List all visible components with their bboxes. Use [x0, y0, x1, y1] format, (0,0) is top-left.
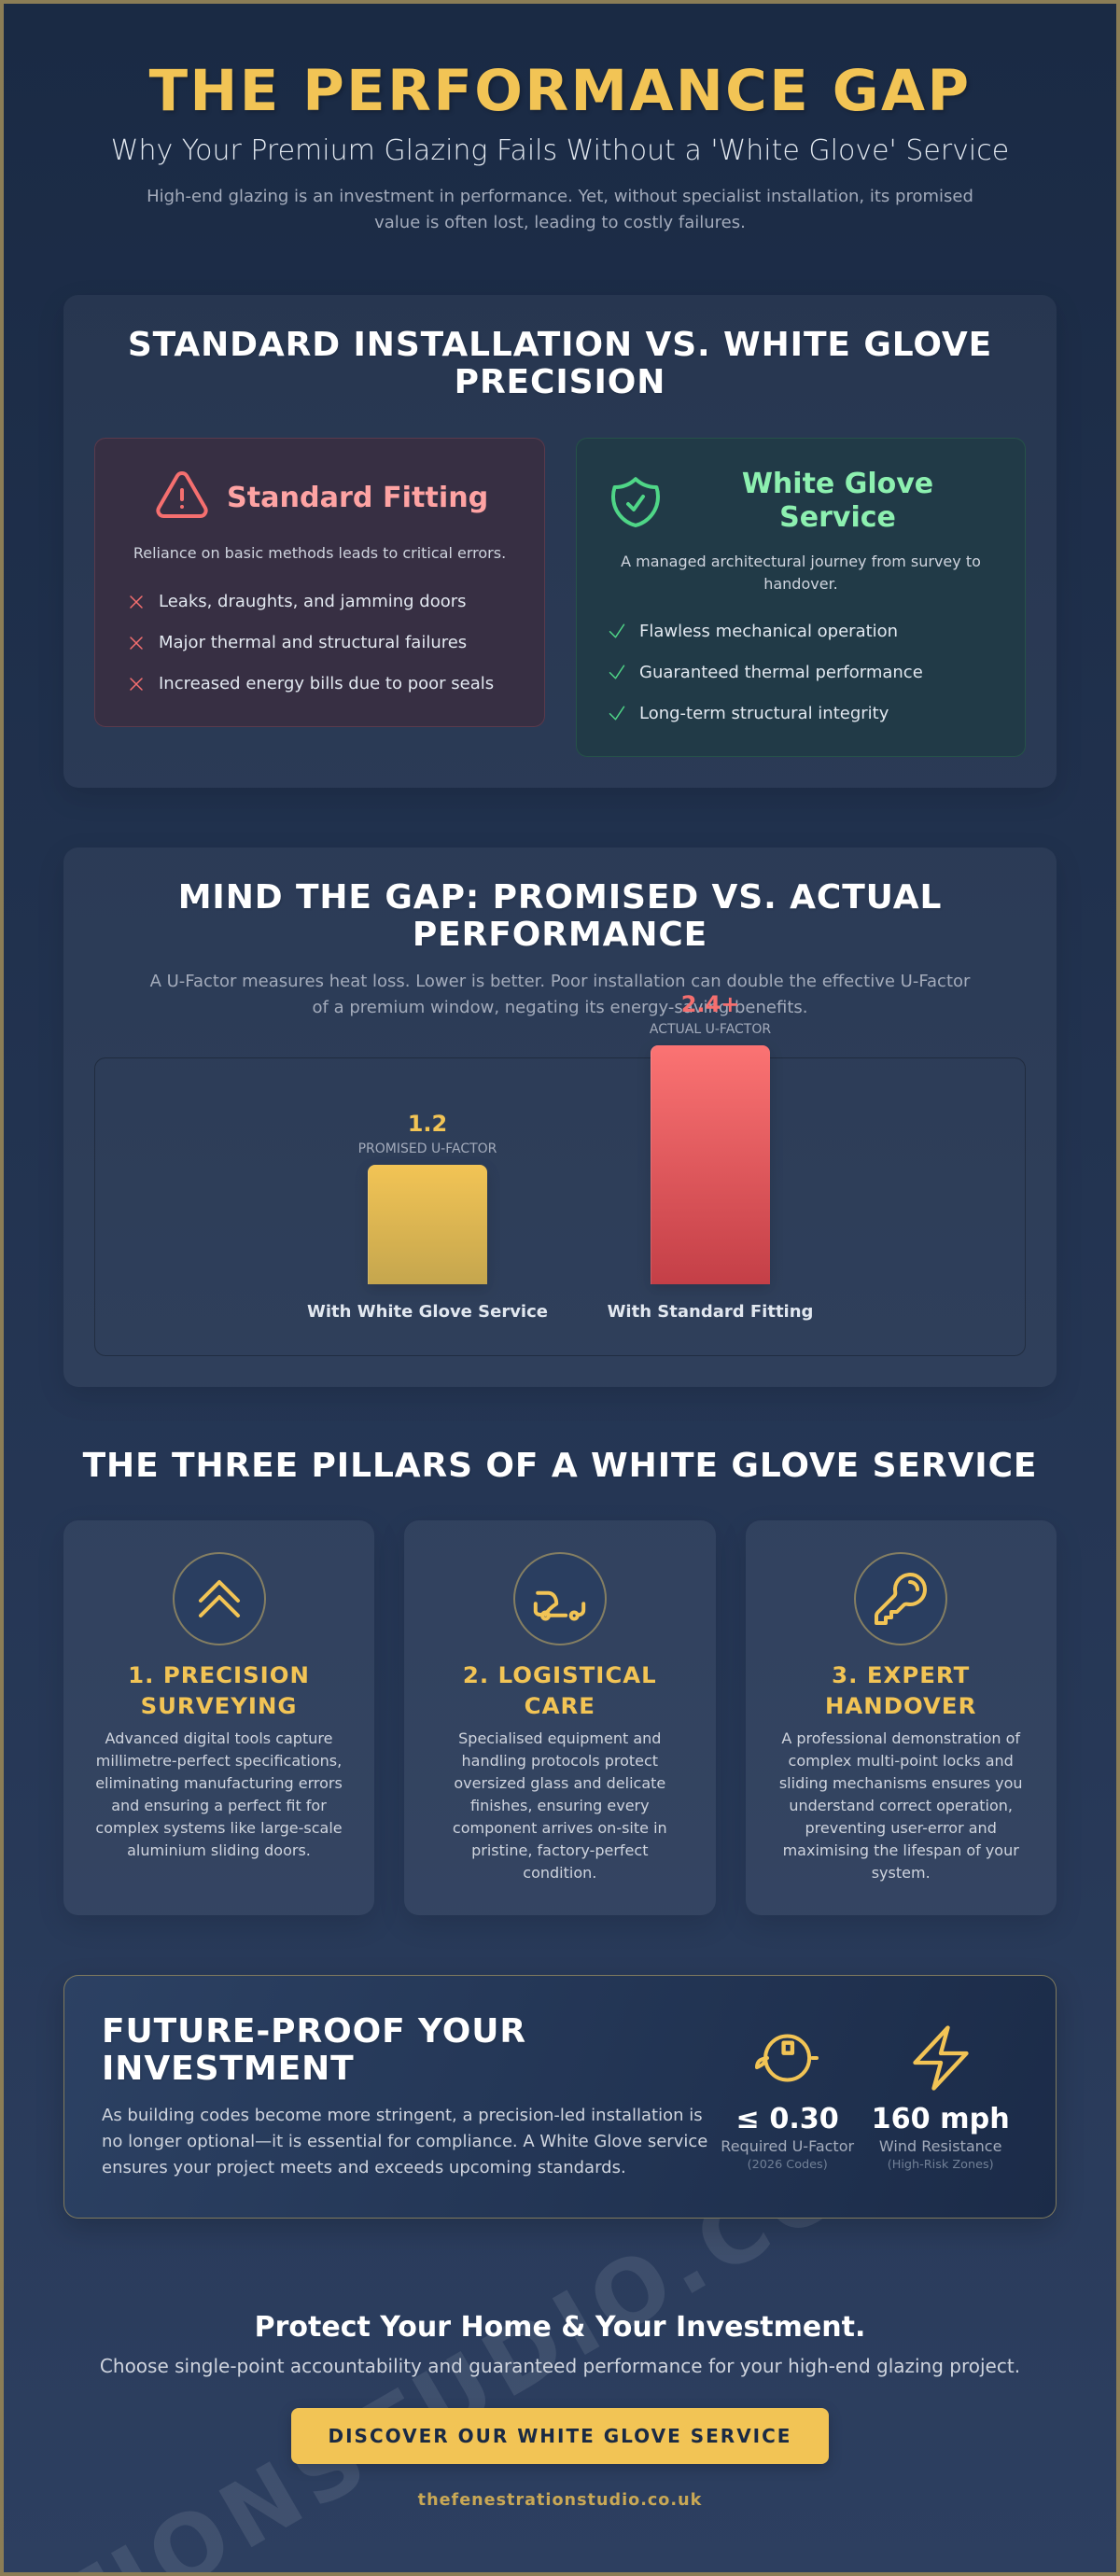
list item: Major thermal and structural failures	[159, 633, 467, 651]
body: Specialised equipment and	[458, 1729, 661, 1747]
icon: check 3	[609, 706, 625, 721]
body: understand correct operation,	[789, 1797, 1013, 1814]
body: aluminium sliding doors.	[127, 1841, 311, 1859]
body: condition.	[523, 1864, 596, 1882]
icon: check 2	[609, 665, 625, 679]
subtitle: Why Your Premium Glazing Fails Without a 'White Glove' Service	[111, 134, 1009, 167]
title	[463, 1661, 657, 1719]
note: (High-Risk Zones)	[888, 2158, 994, 2172]
heading	[178, 878, 942, 954]
heading: FUTURE-PROOF YOUR	[102, 2012, 526, 2051]
body: complex systems like large-scale	[95, 1819, 343, 1837]
caption: promised: PROMISED U-FACTOR	[358, 1141, 497, 1156]
icon: lightning bolt	[913, 2025, 969, 2091]
description: A U-Factor measures heat loss. Lower is better. Poor installation can double the effective U-Factor	[150, 972, 970, 991]
heading: three pillars: THE THREE PILLARS OF A WHITE GLOVE SERVICE	[83, 1447, 1037, 1485]
panel: pillar 3	[746, 1520, 1057, 1915]
title: THE PERFORMANCE GAP	[149, 59, 971, 124]
body: A professional demonstration of	[781, 1729, 1020, 1747]
body	[779, 1729, 1023, 1882]
label: white glove: With White Glove Service	[307, 1302, 548, 1322]
panel: white glove service	[576, 438, 1026, 757]
icon: truck	[513, 1552, 607, 1645]
value: 1.2: 1.2	[408, 1111, 447, 1137]
heading: STANDARD INSTALLATION VS. WHITE GLOVE	[128, 326, 992, 364]
body: complex multi-point locks and	[789, 1752, 1014, 1770]
footer heading: Protect Your Home & Your Investment.	[255, 2311, 865, 2344]
title: 3. EXPERT	[832, 1661, 970, 1687]
description	[149, 972, 971, 1017]
title: 1. PRECISION	[128, 1661, 310, 1687]
title: 2. LOGISTICAL	[463, 1661, 657, 1687]
icon: gauge	[755, 2035, 819, 2081]
body: maximising the lifespan of your	[783, 1841, 1019, 1859]
bar: white glove	[368, 1165, 487, 1284]
heading: standard fitting: Standard Fitting	[227, 482, 488, 514]
intro text: value is often lost, leading to costly failures.	[374, 213, 746, 231]
body: ensures your project meets and exceeds upcoming standards.	[102, 2158, 626, 2177]
panel: standard fitting	[94, 438, 545, 727]
description: handover.	[763, 575, 838, 592]
body: millimetre-perfect specifications,	[96, 1752, 342, 1770]
body: system.	[872, 1864, 931, 1882]
title	[825, 1661, 976, 1719]
icon: warning triangle	[156, 471, 208, 518]
icon: shield check	[611, 477, 660, 527]
value: ≤ 0.30	[736, 2103, 839, 2135]
title: HANDOVER	[825, 1691, 976, 1719]
body: finishes, ensuring every	[470, 1797, 650, 1814]
value: 160 mph	[872, 2103, 1010, 2135]
intro text	[147, 187, 973, 231]
list item: Guaranteed thermal performance	[639, 663, 923, 681]
panel: pillar 2	[404, 1520, 716, 1915]
icon: cross 1	[130, 595, 143, 609]
value: 2.4+: 2.4+	[681, 991, 739, 1017]
list item: Flawless mechanical operation	[639, 622, 898, 640]
body: oversized glass and delicate	[454, 1774, 665, 1792]
body: preventing user-error and	[805, 1819, 997, 1837]
intro text: High-end glazing is an investment in performance. Yet, without specialist installation, its promised	[147, 187, 973, 205]
panel: future-proof	[63, 1975, 1057, 2219]
panel: standard vs white glove	[63, 295, 1057, 788]
icon: chevrons	[172, 1552, 265, 1645]
body: and ensuring a perfect fit for	[111, 1797, 327, 1814]
note: (2026 Codes)	[748, 2158, 828, 2172]
icon: cross 2	[130, 637, 143, 650]
body: Advanced digital tools capture	[105, 1729, 332, 1747]
title: SURVEYING	[141, 1691, 297, 1719]
button	[291, 2408, 829, 2464]
heading: MIND THE GAP: PROMISED VS. ACTUAL	[178, 878, 942, 917]
panel: pillar 1	[63, 1520, 374, 1915]
body	[102, 2106, 707, 2177]
stat: wind resistance	[872, 2025, 1010, 2172]
heading	[128, 326, 992, 401]
bar: standard	[651, 1045, 770, 1284]
body	[95, 1729, 343, 1859]
heading: white glove service: Service	[779, 500, 896, 534]
footer text: Choose single-point accountability and guaranteed performance for your high-end glazing project.	[100, 2354, 1020, 2376]
body: sliding mechanisms ensures you	[779, 1774, 1023, 1792]
description: Reliance on basic methods leads to critical errors.	[133, 543, 506, 562]
list item: Long-term structural integrity	[639, 704, 889, 722]
title: CARE	[525, 1691, 595, 1719]
heading: white glove service	[742, 467, 933, 534]
description: A managed architectural journey from survey to	[621, 553, 981, 569]
body: eliminating manufacturing errors	[95, 1774, 343, 1792]
description	[621, 553, 981, 592]
body: component arrives on-site in	[453, 1819, 667, 1837]
title	[128, 1661, 310, 1719]
body: handling protocols protect	[462, 1752, 658, 1770]
bar chart	[94, 1057, 1026, 1356]
heading: PRECISION	[455, 363, 665, 401]
caption: actual: ACTUAL U-FACTOR	[650, 1022, 771, 1037]
heading: INVESTMENT	[102, 2050, 355, 2088]
icon: key	[854, 1552, 947, 1645]
body	[453, 1729, 667, 1882]
website url: thefenestrationstudio.co.uk	[418, 2490, 702, 2509]
list item: Increased energy bills due to poor seals	[159, 674, 494, 693]
panel: mind the gap	[63, 847, 1057, 1387]
heading: white glove service: White Glove	[742, 467, 933, 500]
body: pristine, factory-perfect	[471, 1841, 648, 1859]
body: As building codes become more stringent, a precision-led installation is	[102, 2106, 703, 2125]
button: DISCOVER OUR WHITE GLOVE SERVICE	[329, 2425, 791, 2447]
label: standard: With Standard Fitting	[608, 1302, 813, 1322]
icon: check 1	[609, 623, 625, 638]
label: Wind Resistance	[879, 2137, 1001, 2154]
description: of a premium window, negating its energy-saving benefits.	[313, 998, 807, 1017]
list item: Leaks, draughts, and jamming doors	[159, 592, 467, 610]
body: no longer optional—it is essential for compliance. A White Glove service	[102, 2132, 707, 2151]
stat: u-factor	[721, 2035, 855, 2172]
icon: cross 3	[130, 678, 143, 691]
heading	[102, 2012, 526, 2088]
heading: PERFORMANCE	[413, 916, 707, 954]
label: Required U-Factor	[721, 2137, 854, 2154]
